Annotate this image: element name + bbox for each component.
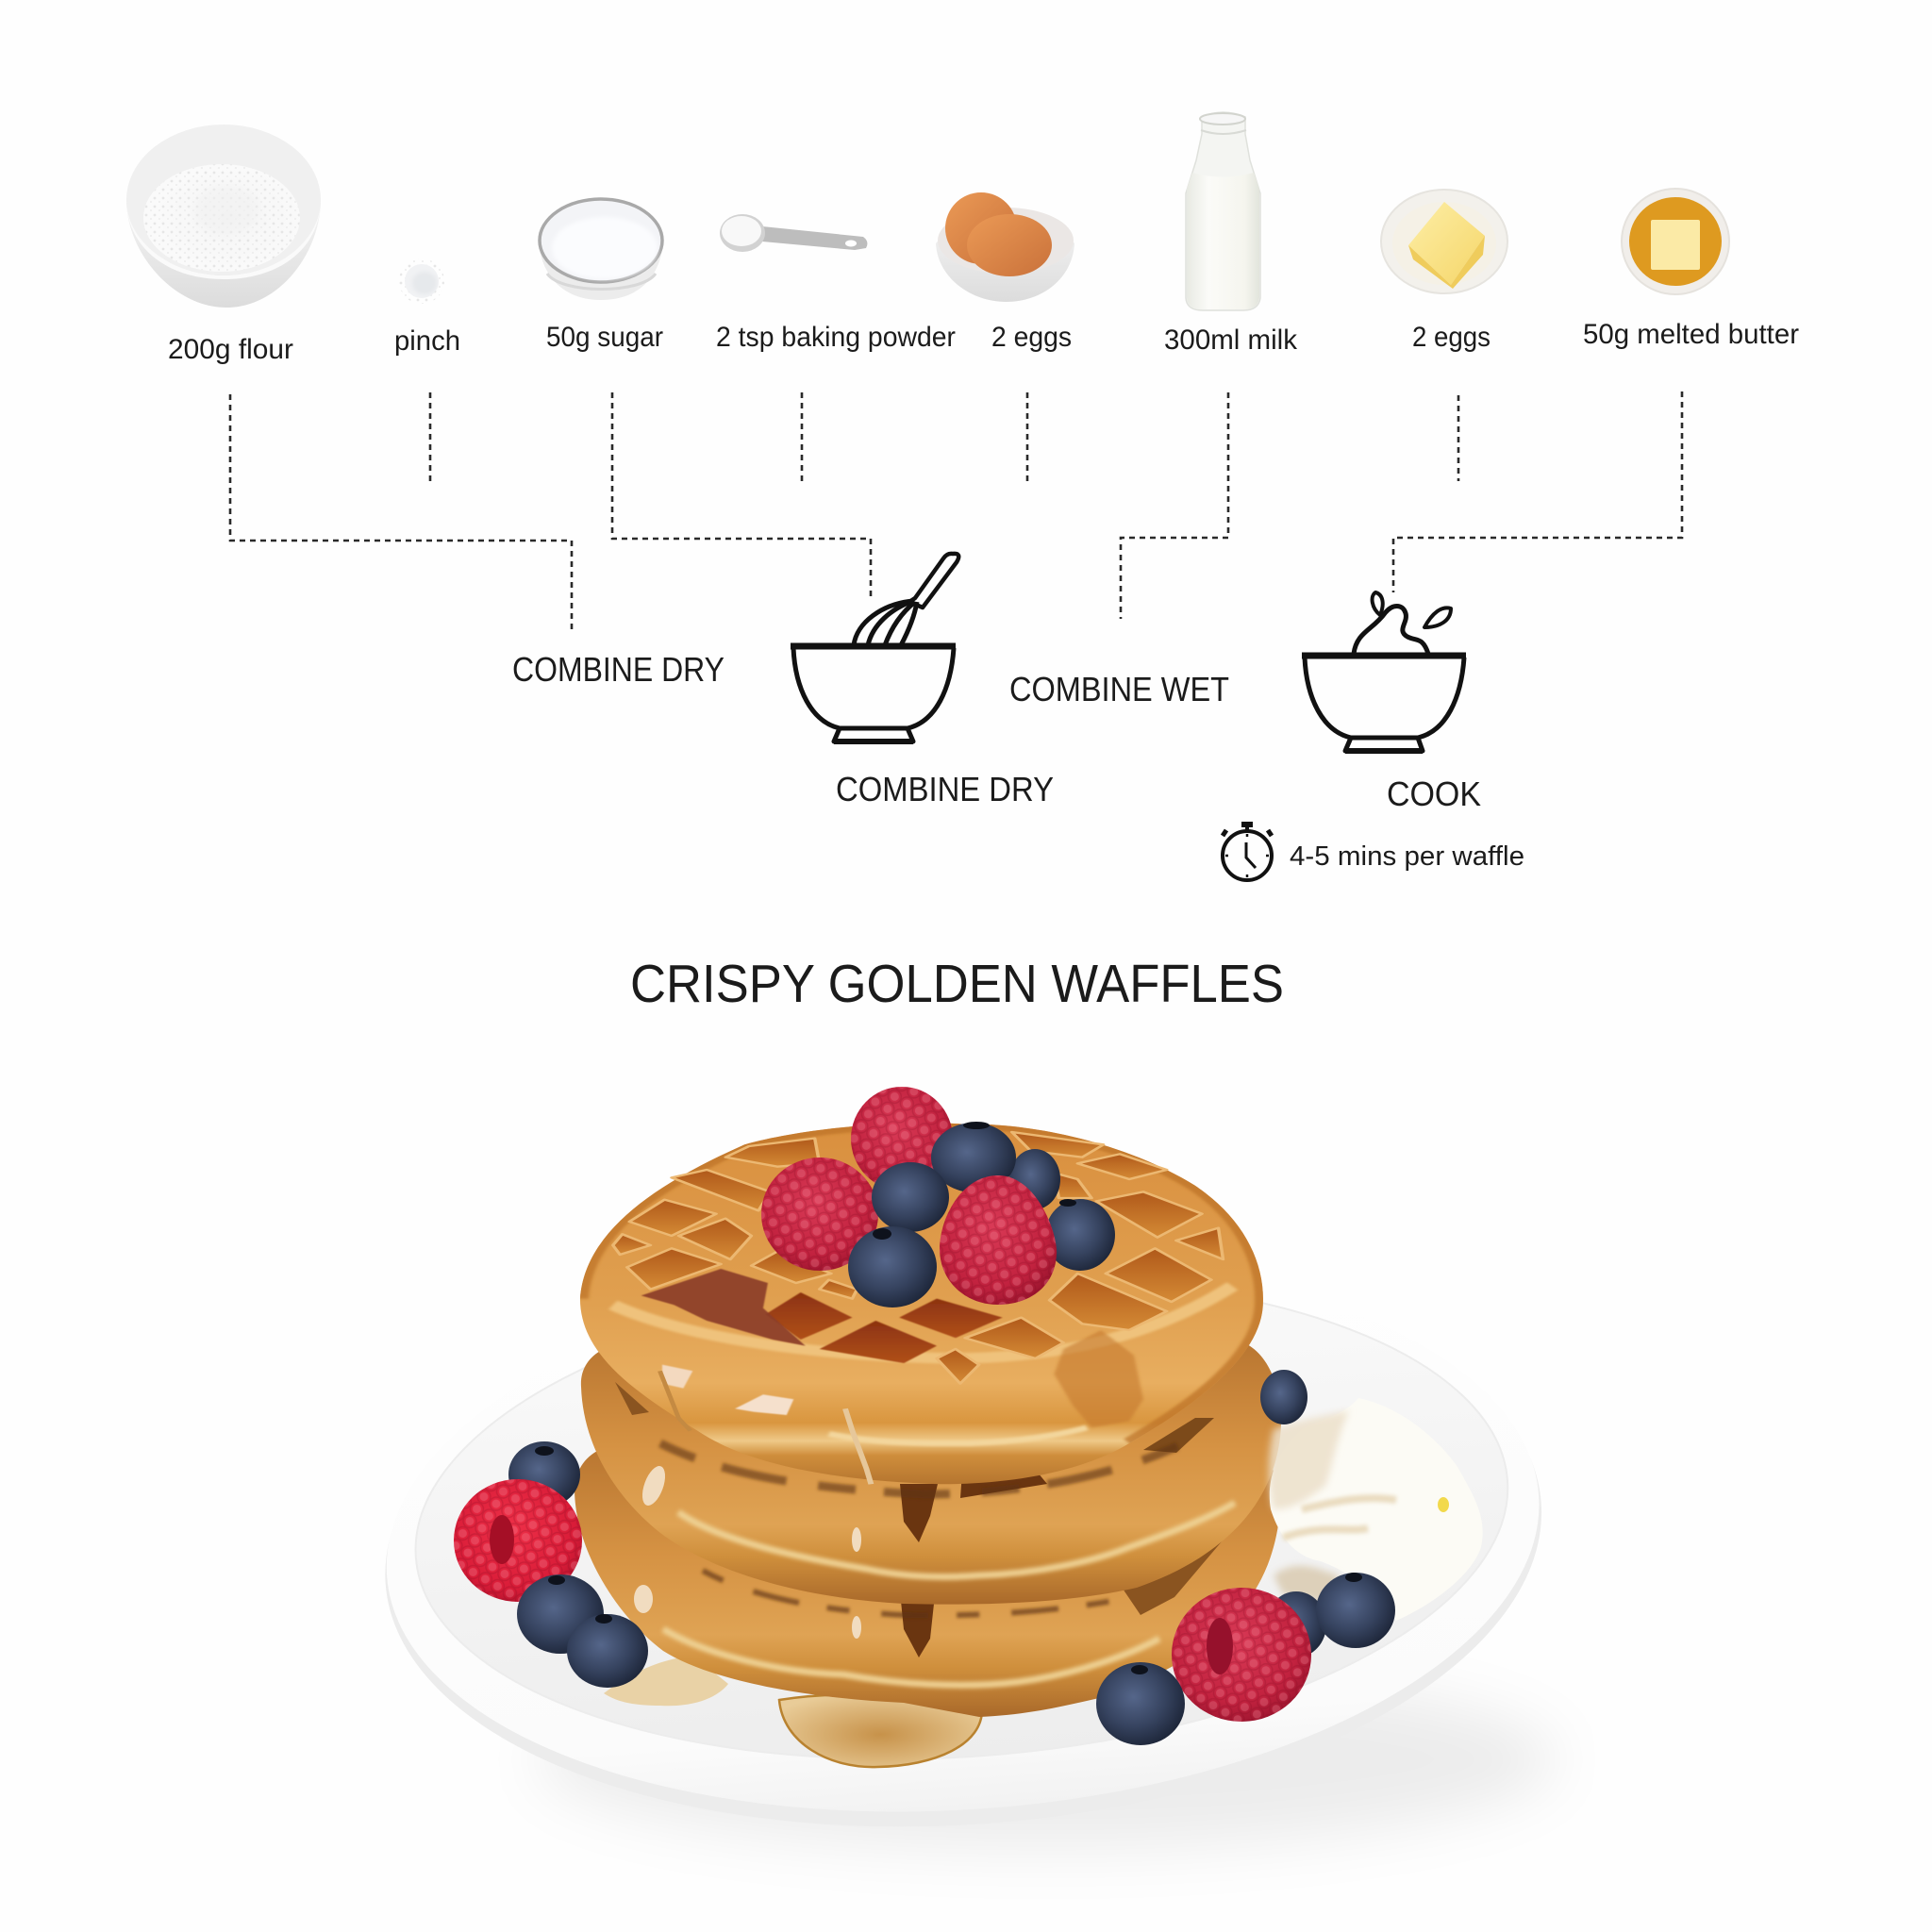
label: 50g melted butter: 50g melted butter [1583,319,1799,350]
ingredient: flour bowl [126,125,321,308]
label: 200g flour: 200g flour [168,334,293,365]
label: 2 eggs: 2 eggs [991,322,1072,353]
label: cook time: 4-5 mins per waffle [1290,841,1524,872]
waffle body [580,1123,1263,1484]
label: combine dry under bowl: COMBINE DRY [836,770,1054,808]
label: 2 tsp baking powder: 2 tsp baking powder [716,322,956,353]
icon: bowl with whisk [791,554,958,741]
ingredient: melted butter dish [1622,189,1729,294]
waffle: middle [581,1340,1281,1605]
plate [366,1223,1561,1864]
syrup droplets on lower waffles [634,1463,861,1639]
top berries [761,1087,1115,1307]
gap shadow under middle waffle [703,1571,1137,1615]
whipped cream [1269,1398,1483,1621]
label: pinch: pinch [394,325,460,357]
waffle pockets [613,1132,1223,1384]
bright band [829,1427,1087,1443]
gap shadow under top waffle [660,1443,1179,1494]
label: combine wet: COMBINE WET [1009,670,1229,708]
side berries [454,1370,1395,1745]
label: cook: COOK [1387,774,1481,813]
icon: stopwatch [1223,822,1272,880]
waffle: top [580,1123,1263,1484]
icon: bowl with batter splash [1302,592,1466,751]
ingredient: milk bottle [1186,112,1260,310]
syrup-filled pockets [765,1292,1003,1363]
darker toasted rim [580,1123,1263,1443]
syrup pool on surface [641,1269,806,1346]
plate shadow [538,1670,1557,1849]
illustration: waffle stack on plate [366,1087,1561,1864]
syrup pools [604,1656,982,1767]
syrup drips [1054,1330,1143,1427]
ingredient: baking powder spoon [720,214,867,252]
ingredient: pinch of salt [399,258,444,304]
title: CRISPY GOLDEN WAFFLES [630,954,1284,1014]
label: 300ml milk: 300ml milk [1164,325,1298,356]
ingredient: sugar glass bowl [539,199,663,300]
connector lines [230,391,1682,634]
waffle: bottom [575,1443,1280,1717]
label: 2 eggs (second): 2 eggs [1412,322,1491,353]
label: 50g sugar: 50g sugar [546,322,663,353]
ingredient: eggs in bowl [936,192,1074,302]
ingredient: butter on dish [1381,190,1507,293]
label: combine dry left: COMBINE DRY [512,650,724,689]
inner ridge lip [613,1286,1232,1358]
